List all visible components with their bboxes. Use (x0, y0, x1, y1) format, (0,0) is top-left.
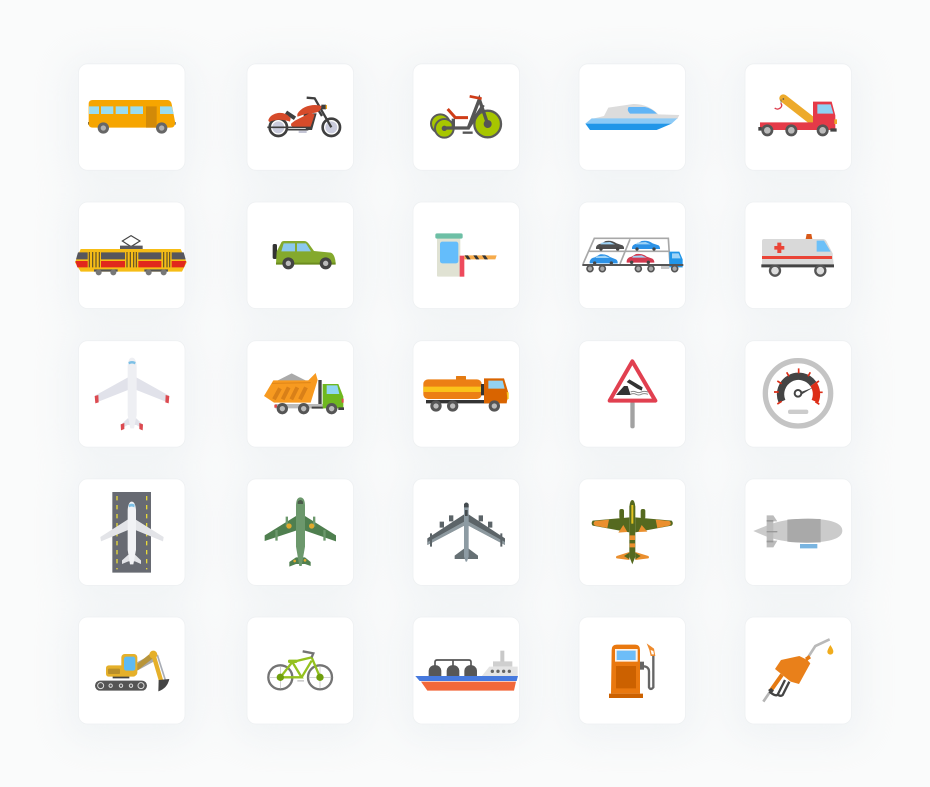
icon: airplane on runway (100, 492, 164, 573)
card row 1 (78, 64, 852, 170)
icon: tricycle (431, 96, 501, 138)
icon: tram (75, 236, 187, 275)
icon: fuel pump (609, 643, 655, 698)
icon: car carrier truck (582, 238, 683, 272)
icon: jeep (273, 241, 336, 269)
icon: camouflage propeller plane (592, 500, 673, 564)
icon: tow truck (758, 98, 837, 136)
card row 3 (78, 341, 852, 447)
icon: motorcycle (267, 98, 340, 136)
icon: excavator (95, 651, 169, 691)
card row 5 (78, 617, 852, 724)
icon: fuel nozzle (763, 639, 833, 702)
icon: dump truck (264, 373, 344, 414)
icon: speedometer (765, 361, 831, 426)
icon: road warning sign (610, 361, 655, 428)
icon: tanker truck (423, 376, 509, 412)
icon: bicycle (268, 651, 332, 689)
icon: ambulance (761, 234, 834, 276)
icon: airship (753, 515, 842, 548)
icon: bus (88, 100, 176, 134)
icon: gas carrier ship (415, 651, 518, 691)
icon: toll booth barrier (435, 233, 497, 277)
icon: military transport plane (265, 497, 336, 567)
card row 4 (78, 479, 852, 585)
icon: passenger airplane (95, 358, 169, 430)
icon: yacht (585, 104, 679, 130)
icon: bomber plane (427, 502, 505, 562)
card row 2 (78, 202, 852, 308)
